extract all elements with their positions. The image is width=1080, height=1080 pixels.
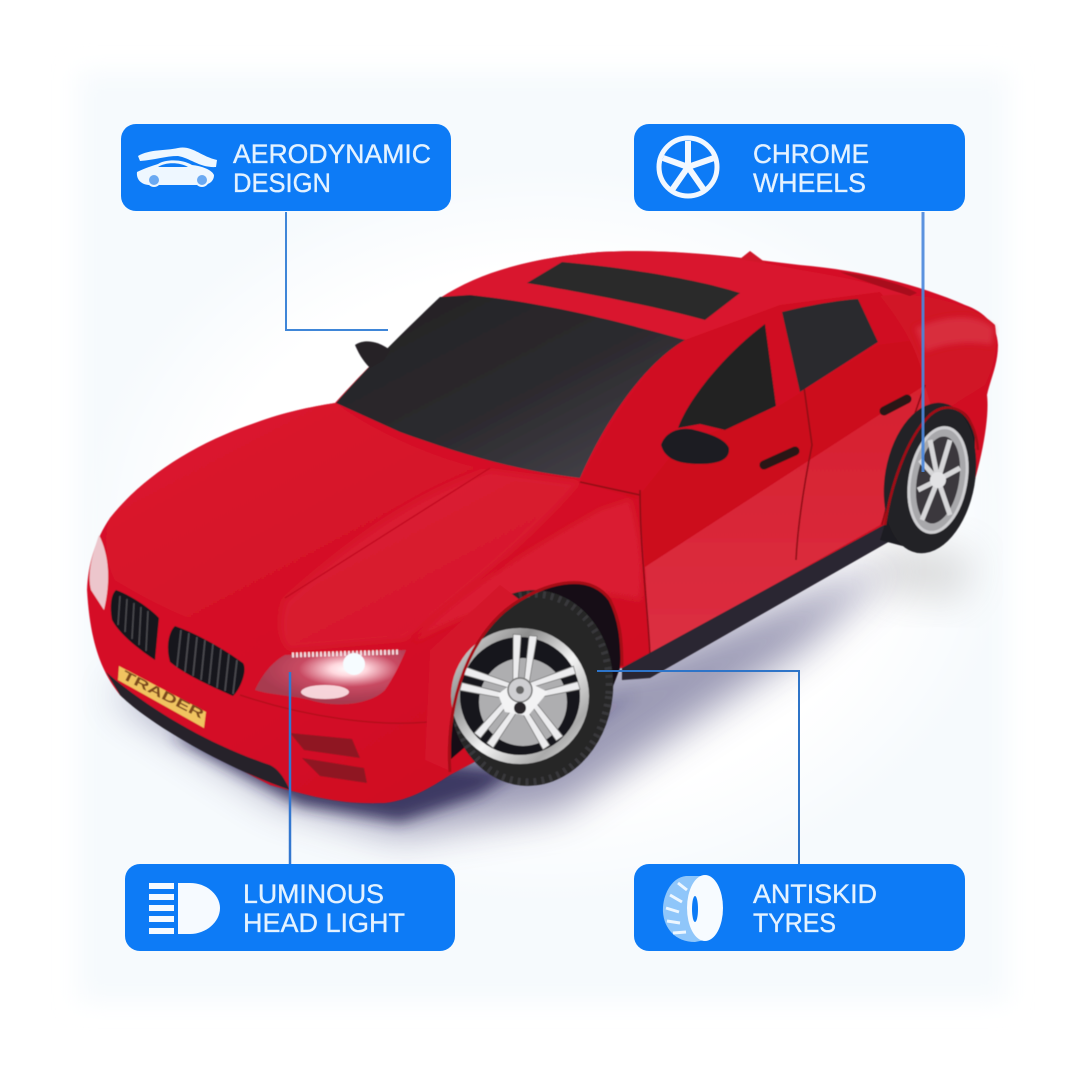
door upper band <box>640 340 925 567</box>
label: ANTISKID <box>753 879 877 909</box>
vents <box>290 733 367 783</box>
right grille <box>168 626 245 696</box>
label: WHEELS <box>753 168 866 198</box>
rear quarter panel <box>880 295 996 420</box>
label: TYRES <box>753 908 836 938</box>
connector: luminous head light <box>289 672 291 864</box>
hood panel <box>107 403 580 650</box>
bumper crease <box>240 695 445 723</box>
panel: chrome wheels <box>634 124 965 211</box>
sunroof <box>527 262 740 320</box>
front wheel <box>425 582 623 794</box>
windshield <box>336 295 685 478</box>
fender overlay <box>425 585 520 772</box>
door handles <box>764 399 907 465</box>
label <box>753 139 869 198</box>
label <box>753 879 877 938</box>
wheel arch <box>449 583 621 760</box>
car shadow <box>110 545 975 835</box>
front bumper lower lip <box>106 672 290 790</box>
car body <box>87 251 998 803</box>
label: HEAD LIGHT <box>243 908 405 938</box>
icon: wheel <box>659 138 717 196</box>
trunk lip <box>840 272 917 296</box>
icon: tyre <box>663 875 723 942</box>
icon: headlight <box>149 883 220 934</box>
label: CHROME <box>753 139 869 169</box>
door mirror <box>661 429 729 464</box>
fender edge <box>449 583 622 772</box>
spokes <box>460 634 580 750</box>
left mirror <box>355 341 390 368</box>
headlight <box>255 650 406 704</box>
panel: antiskid tyres <box>634 864 965 951</box>
window pillar surround <box>580 292 925 500</box>
front tyre <box>439 582 623 794</box>
connector: chrome wheels <box>922 212 924 472</box>
red toy car <box>87 251 998 803</box>
front side window <box>678 324 776 430</box>
roof highlight <box>440 251 925 340</box>
rear side window <box>782 299 878 392</box>
left headlamp <box>90 535 108 610</box>
licence plate <box>118 666 208 728</box>
connector: antiskid tyres <box>597 671 799 864</box>
rear rim <box>901 423 975 537</box>
rear wheel <box>872 395 988 561</box>
panel: aerodynamic design <box>121 124 451 211</box>
panel: luminous head light <box>125 864 455 951</box>
icon: aerodynamic car <box>137 147 217 186</box>
front fender highlight <box>415 500 642 640</box>
rear arch <box>885 408 978 525</box>
lower door panels <box>645 385 935 655</box>
chrome rim <box>451 628 589 764</box>
label: DESIGN <box>233 168 331 198</box>
side sill <box>622 521 892 680</box>
connector: aerodynamic design <box>286 212 388 330</box>
hood highlight <box>280 470 580 650</box>
left grille <box>111 590 159 660</box>
label <box>233 139 431 198</box>
label: AERODYNAMIC <box>233 139 431 169</box>
roof antenna <box>740 251 766 263</box>
label: LUMINOUS <box>243 879 384 909</box>
label <box>243 879 405 938</box>
licence plate: TRADER <box>120 667 208 722</box>
door seams <box>580 380 925 655</box>
